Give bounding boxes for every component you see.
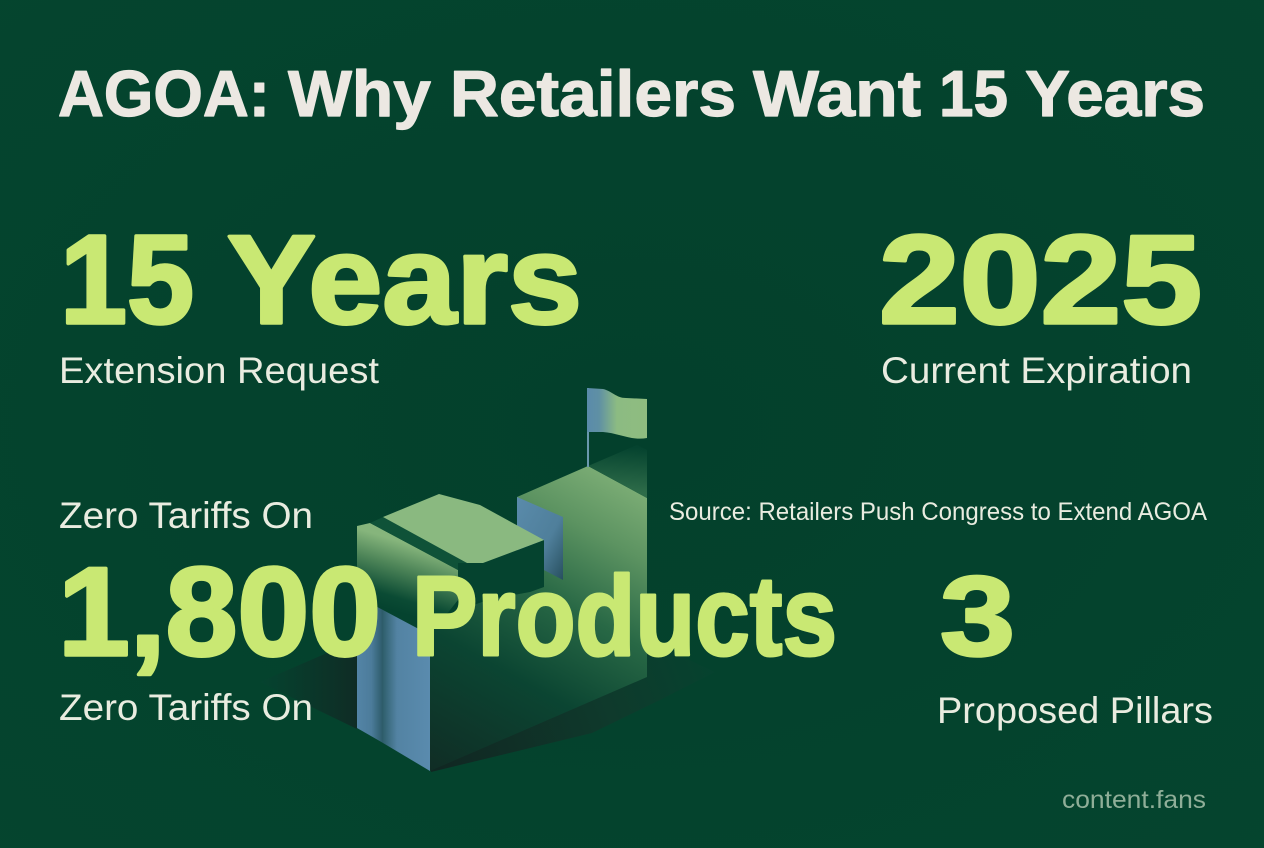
left shadow xyxy=(260,640,357,729)
top slab front xyxy=(458,540,544,605)
value xyxy=(58,541,837,682)
stat: 1,800 Products xyxy=(58,495,837,728)
title: Retailers xyxy=(450,57,736,130)
source note: Source: Retailers Push Congress to Extend AGOA xyxy=(669,498,1207,526)
flag xyxy=(587,388,647,439)
stat: 15 Years xyxy=(59,209,582,391)
stat: 3 xyxy=(937,553,1213,731)
title: Want xyxy=(753,57,921,130)
caption: Proposed Pillars xyxy=(937,690,1213,731)
value: 2025 xyxy=(879,209,1202,350)
label below: Zero Tariffs On xyxy=(59,687,313,728)
label above: Zero Tariffs On xyxy=(59,495,313,536)
ground shadow xyxy=(431,640,715,772)
title: 15 xyxy=(939,57,1008,130)
value: 15 xyxy=(60,209,194,350)
stat: 2025 xyxy=(879,209,1202,391)
title xyxy=(58,57,1205,130)
tower blue face xyxy=(517,497,563,580)
value xyxy=(60,209,582,350)
dark strip xyxy=(370,517,467,570)
tower face xyxy=(430,466,647,771)
title: Why xyxy=(288,57,431,130)
value: 3 xyxy=(940,553,1015,679)
value: Products xyxy=(412,553,837,679)
blue pillar right xyxy=(383,610,430,771)
flag shadow xyxy=(588,445,647,498)
illustration: isometric building with flag xyxy=(260,388,715,772)
top slab xyxy=(383,494,544,563)
value: 1,800 xyxy=(58,541,381,682)
caption: Extension Request xyxy=(59,350,380,391)
blue pillar left xyxy=(357,596,383,743)
flag pole xyxy=(587,388,589,467)
value: Years xyxy=(227,209,582,350)
title: Years xyxy=(1025,57,1205,130)
caption: Current Expiration xyxy=(881,350,1192,391)
footer credit: content.fans xyxy=(1062,786,1206,814)
left block roof xyxy=(357,523,458,635)
title: AGOA: xyxy=(58,57,270,130)
